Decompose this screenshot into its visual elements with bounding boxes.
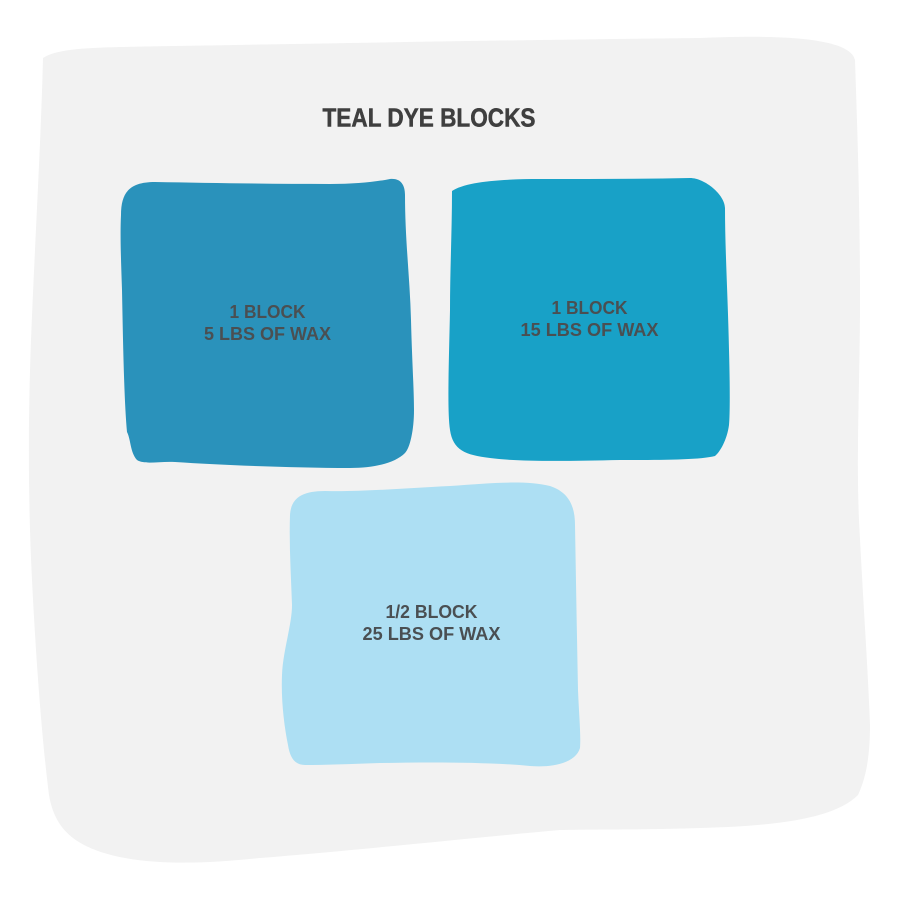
label: block 1: 5 LBS OF WAX	[204, 324, 331, 344]
label: block 1: 1 BLOCK	[230, 302, 306, 322]
label: block 2: 15 LBS OF WAX	[520, 320, 658, 340]
block: 15 lbs of wax	[448, 178, 730, 461]
block: 25 lbs of wax	[282, 483, 580, 766]
label: block 3: 25 LBS OF WAX	[362, 624, 500, 644]
block: 5 lbs of wax	[121, 179, 414, 468]
title: TEAL DYE BLOCKS	[322, 102, 536, 132]
label: block 2: 1 BLOCK	[552, 298, 628, 318]
label: block 3: 1/2 BLOCK	[386, 602, 478, 622]
